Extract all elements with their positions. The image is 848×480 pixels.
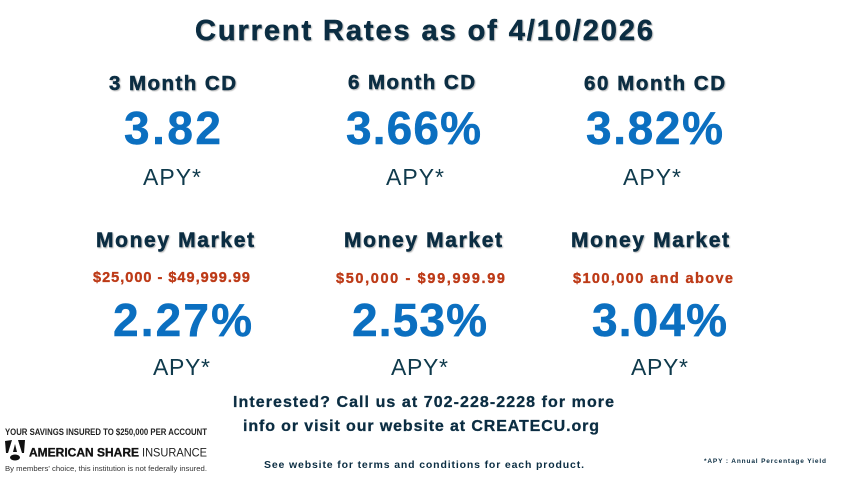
label: APY: APY*	[386, 164, 444, 190]
terms note: See website for terms and conditions for each product.	[264, 459, 584, 471]
insurance disclaimer: By members' choice, this institution is not federally insured.	[5, 464, 207, 473]
label: APY: APY*	[153, 354, 210, 380]
panel: 60 month CD	[584, 72, 725, 190]
rate: 3.66%: 3.66%	[346, 102, 481, 154]
balance range: $100,000 and above	[573, 271, 733, 287]
heading: Money Market: Money Market	[571, 229, 729, 252]
label: APY: APY*	[623, 164, 681, 190]
rate: 3.04%: 3.04%	[592, 294, 727, 346]
heading: 3 Month CD: 3 Month CD	[109, 72, 236, 95]
insurer name: AMERICAN SHARE	[29, 448, 139, 460]
label: APY: APY*	[391, 354, 448, 380]
rate: 3.82%: 3.82%	[586, 102, 723, 154]
label: APY: APY*	[143, 164, 201, 190]
contact call to action: Interested? Call us at 702-228-2228 for more	[233, 394, 614, 411]
contact call to action	[233, 394, 614, 435]
rate: 2.27%: 2.27%	[113, 294, 252, 346]
panel: money market 100,000 tier	[571, 229, 733, 380]
insurance logo block	[5, 427, 207, 473]
rate: 3.82: 3.82	[124, 102, 221, 154]
balance range: $25,000 - $49,999.99	[93, 270, 250, 286]
panel: 3 month CD	[109, 72, 236, 190]
insurance headline: YOUR SAVINGS INSURED TO $250,000 PER ACCOUNT	[5, 427, 207, 437]
insurance logo block: INSURANCE	[142, 448, 207, 460]
heading: 60 Month CD: 60 Month CD	[584, 72, 725, 95]
icon: American Share logo	[5, 440, 25, 460]
contact call to action: info or visit our website at CREATECU.org	[243, 418, 599, 435]
label: APY: APY*	[631, 354, 688, 380]
balance range: $50,000 - $99,999.99	[336, 271, 505, 287]
rate: 2.53%: 2.53%	[352, 294, 487, 346]
panel: 6 month CD	[346, 71, 481, 190]
APY footnote: *APY : Annual Percentage Yield	[704, 458, 826, 465]
panel: money market 50,000 tier	[336, 229, 505, 380]
panel: money market 25,000 tier	[93, 229, 254, 380]
heading: Money Market: Money Market	[344, 229, 502, 252]
heading: 6 Month CD: 6 Month CD	[348, 71, 475, 94]
heading: Money Market: Money Market	[96, 229, 254, 252]
title: Current Rates as of 4/10/2026	[195, 15, 653, 47]
